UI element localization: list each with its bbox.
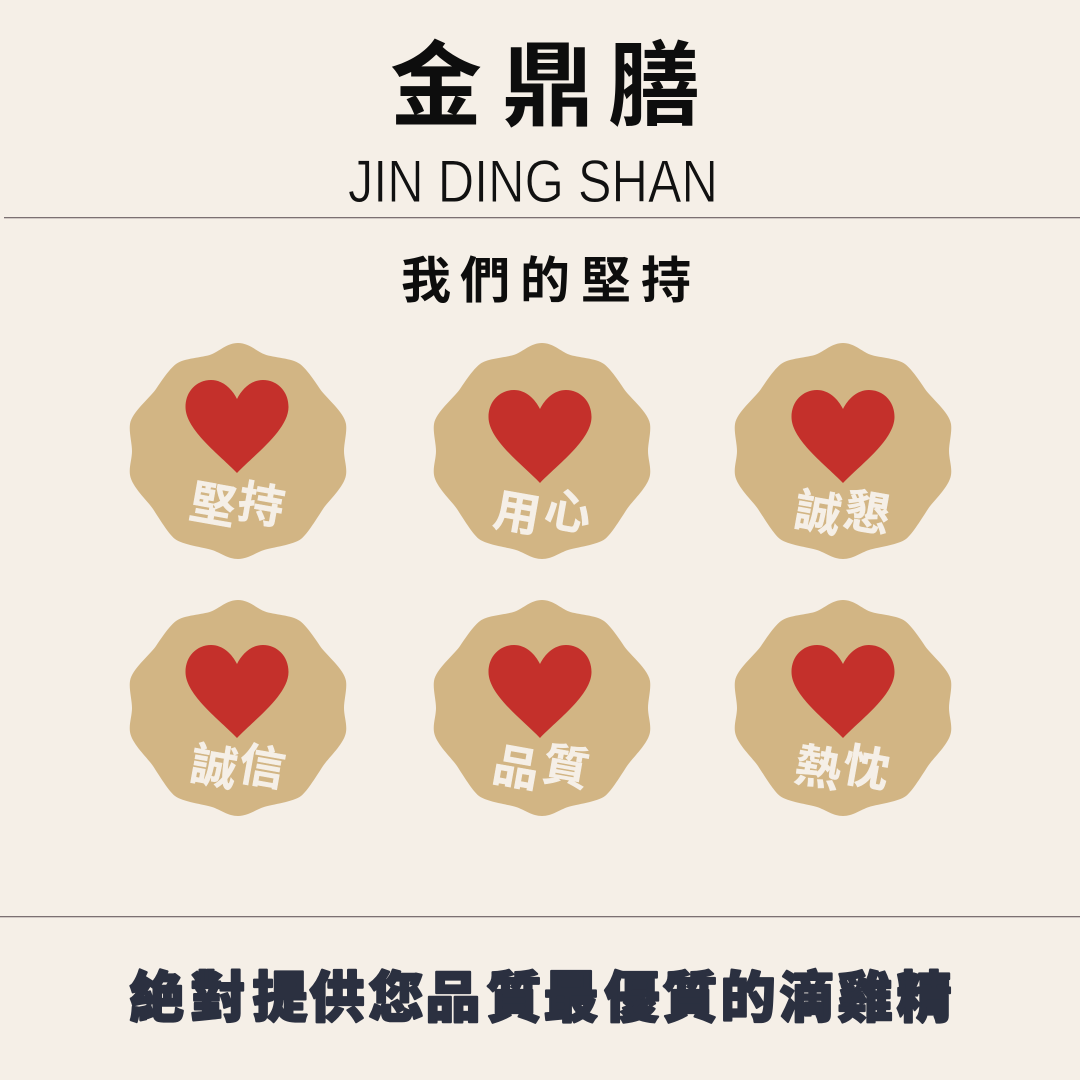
label: 忱 [839, 738, 893, 798]
label [490, 482, 595, 543]
label: 用 [490, 483, 544, 543]
badge shape [434, 600, 650, 816]
icon: heart [186, 645, 288, 738]
icon: heart [792, 645, 894, 738]
badge: 用心 [434, 343, 650, 559]
label: 品 [489, 738, 543, 798]
label: 懇 [840, 483, 894, 543]
label [186, 475, 288, 535]
label: 質 [539, 737, 593, 797]
badge shape [735, 343, 951, 559]
label: 堅 [186, 475, 240, 535]
badge: 誠懇 [735, 343, 951, 559]
icon: heart [488, 390, 592, 483]
label: 心 [541, 482, 595, 542]
label [791, 738, 893, 798]
badge shape [735, 600, 951, 816]
badge shape [130, 600, 346, 816]
badge: 堅持 [130, 343, 346, 559]
badge: 熱忱 [735, 600, 951, 816]
heading: 我們的堅持 [401, 253, 691, 309]
label [791, 483, 894, 543]
label: 持 [234, 475, 288, 535]
label: 熱 [791, 738, 845, 798]
icon: heart [488, 645, 592, 738]
badge shape [130, 343, 346, 559]
badge: 品質 [434, 600, 650, 816]
label: 信 [235, 737, 289, 797]
icon: heart [186, 380, 288, 473]
title: 金鼎膳 [390, 36, 700, 138]
label: 誠 [187, 737, 241, 797]
badge: 誠信 [130, 600, 346, 816]
label [489, 737, 593, 798]
footer slogan: 絶對提供您品質最優質的滴雞精 [129, 967, 952, 1029]
subtitle: JIN DING SHAN [348, 148, 718, 215]
badge shape [434, 343, 650, 559]
label [187, 737, 289, 797]
label: 誠 [791, 483, 845, 543]
icon: heart [792, 390, 894, 483]
